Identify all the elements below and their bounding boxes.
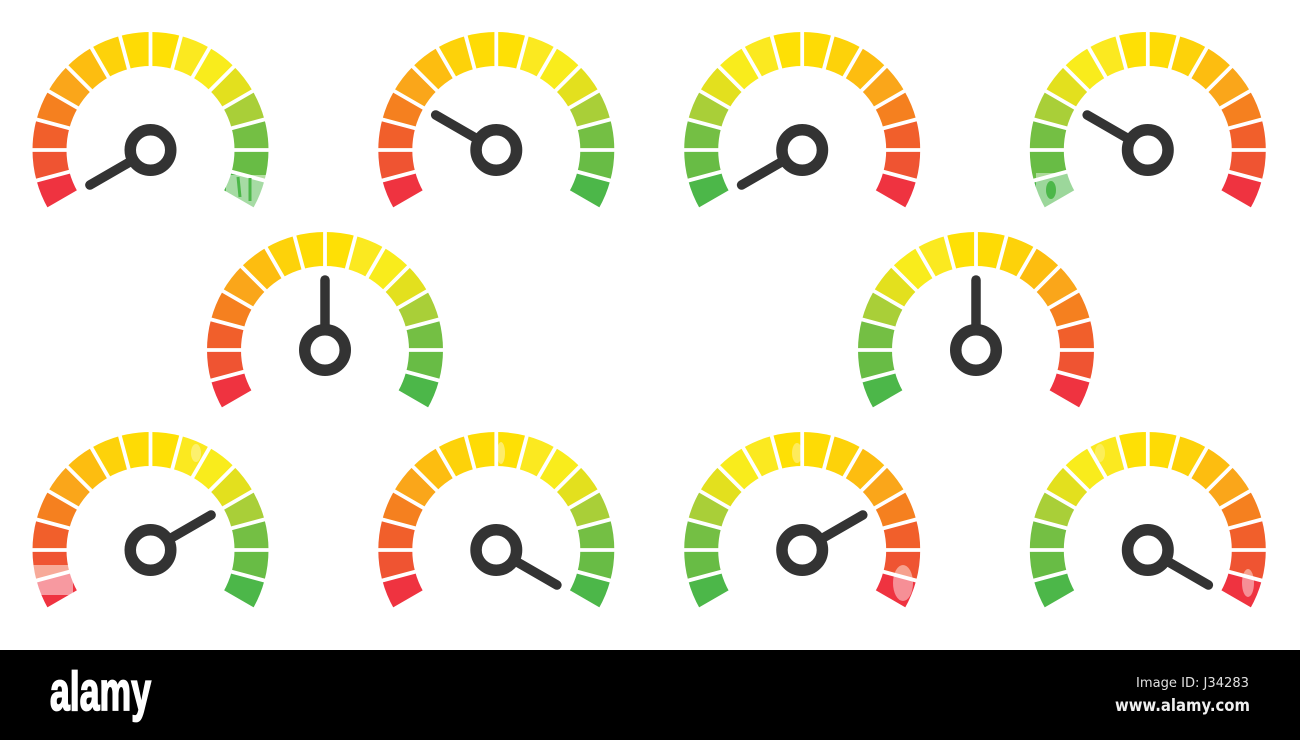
hub: [956, 330, 996, 370]
hub: [476, 130, 517, 170]
needle: [514, 560, 557, 585]
footer bar: [0, 650, 1300, 740]
gauge 6: green to red, needle straight up: [851, 225, 1101, 475]
gauge scale: [200, 225, 450, 475]
needle: [168, 515, 211, 540]
pale watermark remnants over gauge segments: [33, 173, 1254, 601]
gauge 4: green to red, needle upper left: [1023, 25, 1273, 275]
gauge 1: red to green, needle low left: [26, 25, 276, 275]
gauge scale: [371, 25, 621, 275]
gauge 3: green to red, needle low left: [677, 25, 927, 275]
gauge scale: [26, 425, 276, 675]
needle: [436, 115, 479, 140]
gauge 9: green to red, needle upper right: [677, 425, 927, 675]
image id: Image ID: J34283: [1136, 675, 1249, 691]
needle: [1087, 115, 1130, 140]
needle: [820, 515, 863, 540]
hub: [130, 130, 171, 170]
needle: [90, 160, 133, 185]
gauge 2: red to green, needle upper left: [371, 25, 621, 275]
gauge scale: [677, 425, 927, 675]
alamy logo: alamy: [50, 660, 151, 722]
hub: [1128, 130, 1168, 170]
gauge 10: green to red, needle low right: [1023, 425, 1273, 675]
needle: [320, 280, 330, 330]
hub: [782, 530, 822, 570]
hub: [476, 530, 517, 570]
gauge scale: [1023, 425, 1273, 675]
gauge scale: [677, 25, 927, 275]
gauge scale: [851, 225, 1101, 475]
gauge 5: red to green, needle straight up: [200, 225, 450, 475]
gauge scale: [371, 425, 621, 675]
hub: [782, 130, 822, 170]
gauge scale: [1023, 25, 1273, 275]
gauge 7: red to green, needle upper right: [26, 425, 276, 675]
needle: [971, 280, 981, 330]
needle: [1165, 560, 1208, 585]
website: www.alamy.com: [1115, 696, 1250, 715]
hub: [305, 330, 345, 370]
gauge scale: [26, 25, 276, 275]
hub: [130, 530, 171, 570]
needle: [742, 160, 785, 185]
hub: [1128, 530, 1168, 570]
gauge 8: red to green, needle low right: [371, 425, 621, 675]
